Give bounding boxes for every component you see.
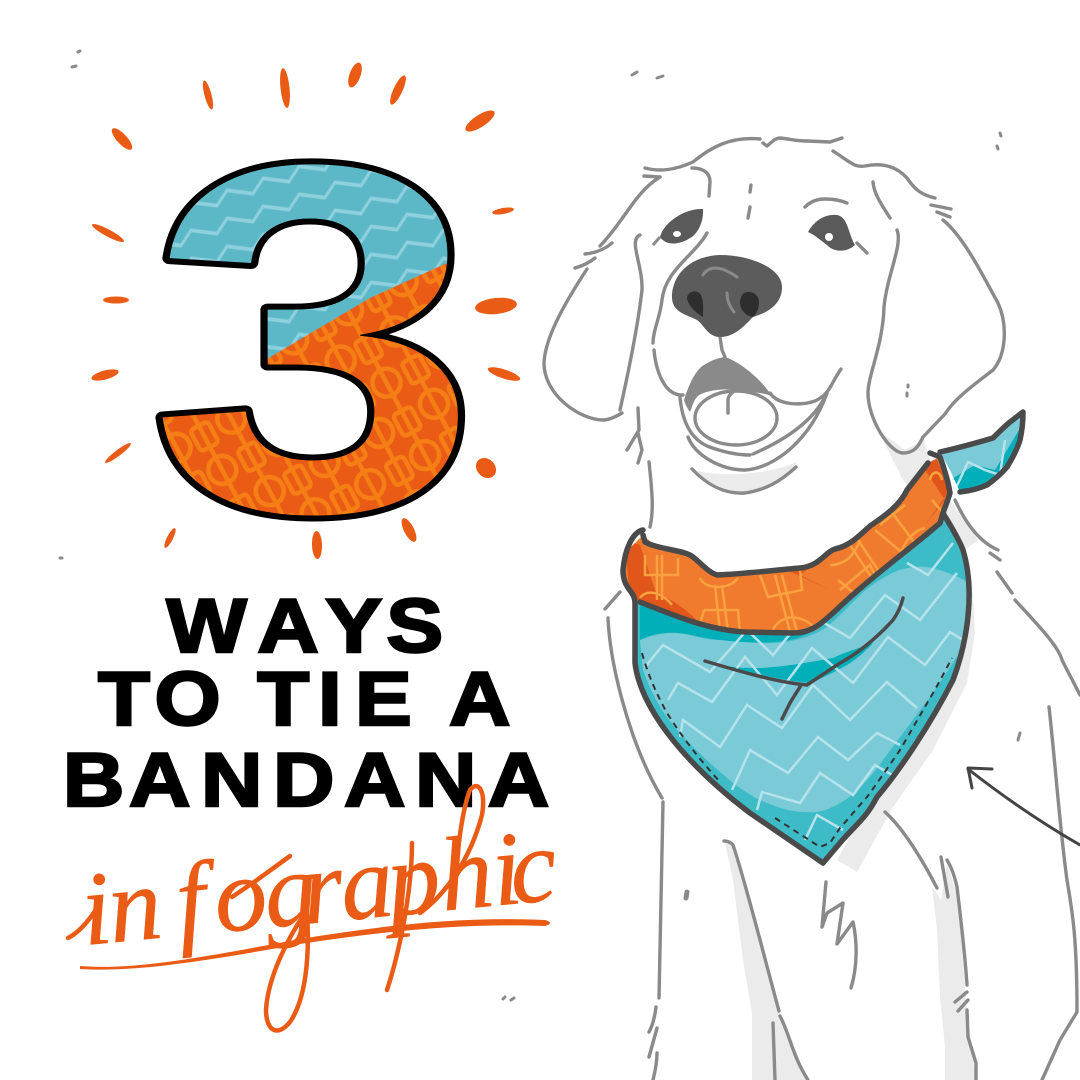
bandana	[615, 405, 1030, 870]
bandana tail knot	[942, 418, 1020, 490]
bandana stitching	[642, 653, 952, 847]
dog eyes and nose	[653, 209, 855, 412]
dog shadows	[692, 430, 978, 1080]
bandana pocket fold line	[705, 598, 903, 719]
title: ways to tie a bandana: BANDANA	[63, 738, 549, 823]
burst rays around the number	[90, 61, 522, 559]
bandana dark outlines	[623, 412, 1023, 863]
script subtitle: infographic with swash: infographic	[76, 806, 562, 968]
bandana body	[638, 520, 966, 860]
arrow pointing to bandana	[968, 768, 1080, 845]
dog illustration: head line work	[544, 138, 1004, 493]
script subtitle: infographic with swash	[68, 786, 562, 1031]
title: ways to tie a bandana: TO TIE A	[98, 657, 510, 742]
large number three with teal and orange patterns: 3	[149, 62, 479, 615]
title: ways to tie a bandana: WAYS	[166, 584, 443, 669]
title: ways to tie a bandana	[63, 584, 549, 823]
bandana collar fold	[626, 458, 948, 630]
